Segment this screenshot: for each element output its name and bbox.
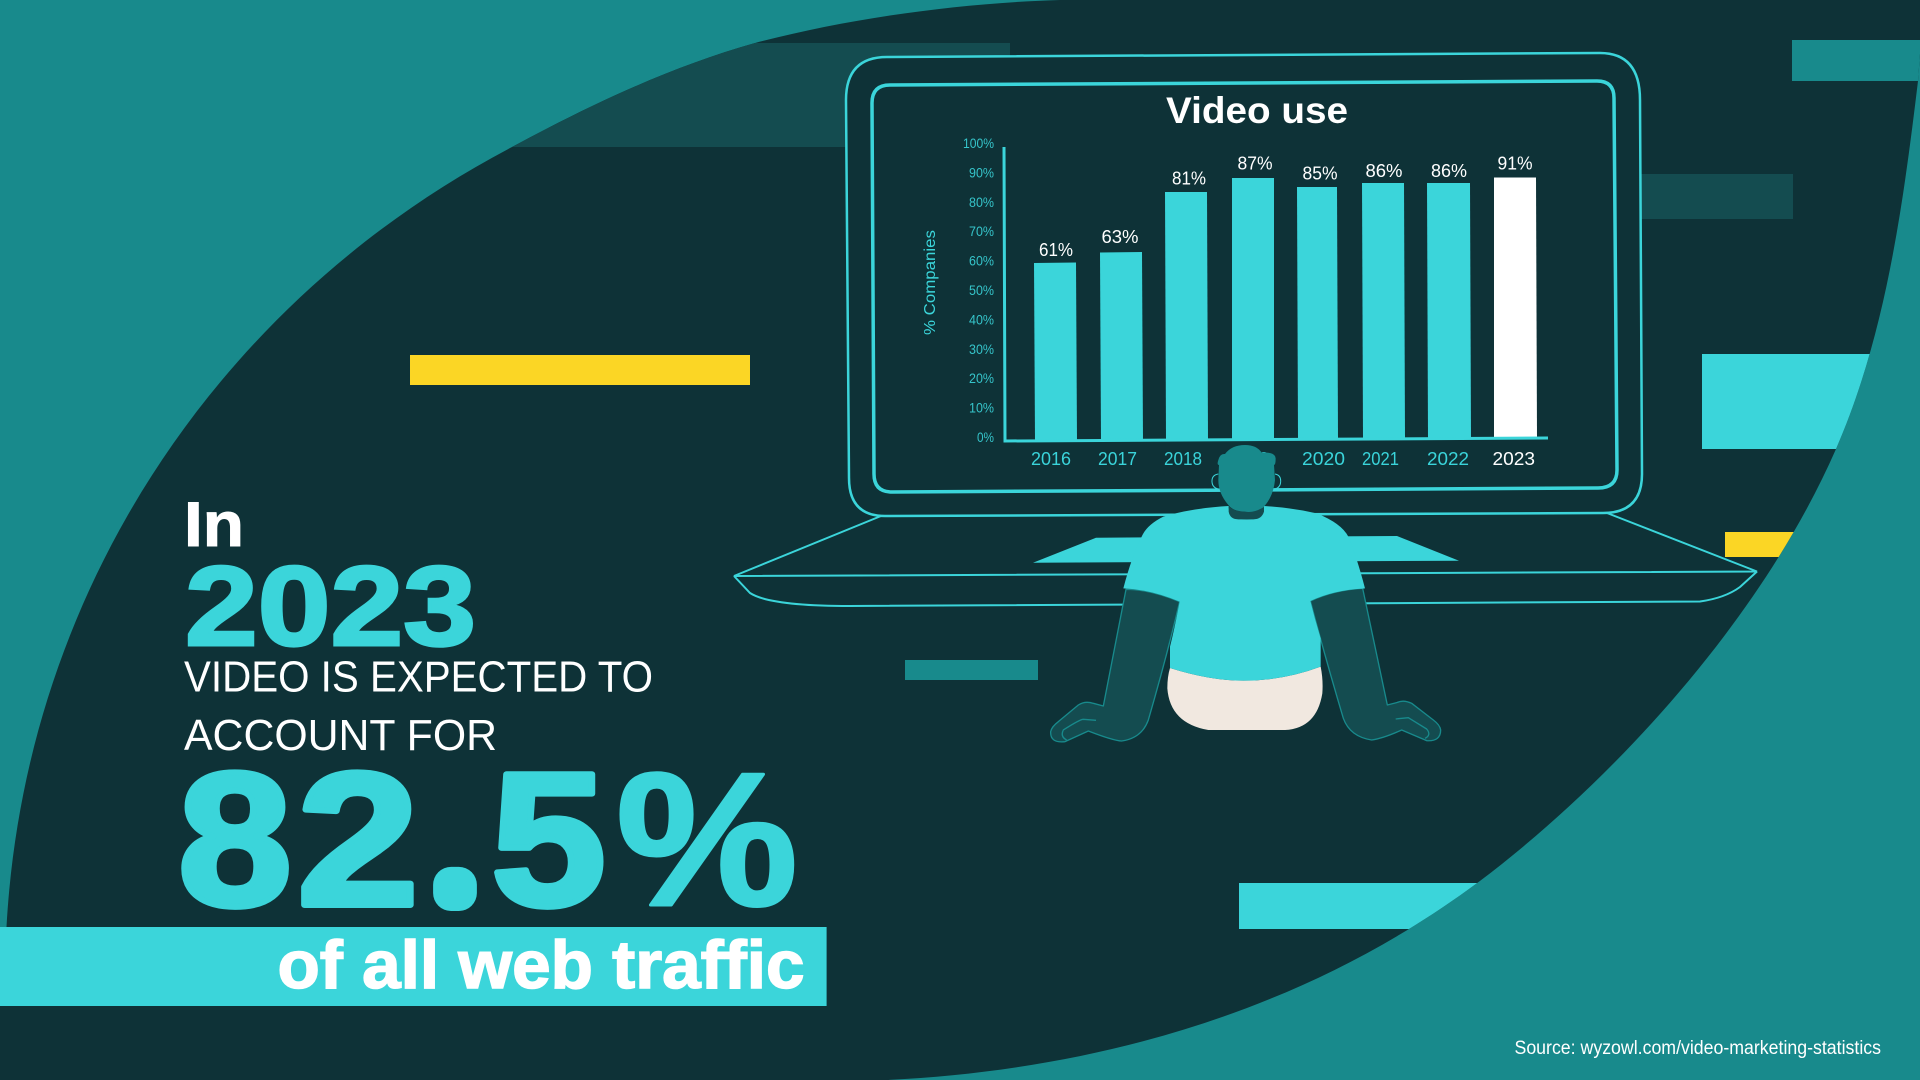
y axis labels bbox=[963, 135, 994, 445]
big number: 82.5%: 8 bbox=[178, 734, 292, 946]
bar 2023 highlighted bbox=[1494, 178, 1537, 438]
chart title: Video use bbox=[1166, 90, 1348, 131]
big number: 82.5%: . bbox=[447, 843, 463, 905]
year labels: 2019 bbox=[1229, 449, 1269, 469]
value labels: 81% bbox=[1172, 169, 1206, 189]
subheading line 1: VIDEO IS EXPECTED TO bbox=[184, 652, 653, 701]
value labels: 86% bbox=[1431, 161, 1467, 181]
banner bar bbox=[0, 927, 827, 1006]
y axis labels: 20% bbox=[969, 370, 994, 386]
big number: 82.5%: 5 bbox=[491, 734, 606, 946]
value labels: 63% bbox=[1102, 227, 1138, 247]
value labels: 85% bbox=[1302, 164, 1338, 184]
y axis labels: 40% bbox=[969, 311, 994, 327]
bar chart: video use bbox=[922, 135, 1548, 469]
person seen from behind bbox=[1051, 445, 1441, 742]
keyboard bbox=[1033, 536, 1459, 563]
shirt bbox=[1123, 506, 1365, 681]
value labels: 86% bbox=[1366, 161, 1402, 181]
y axis labels: 80% bbox=[969, 194, 994, 210]
right arm bbox=[1310, 588, 1441, 741]
head bbox=[1218, 445, 1276, 512]
left arm bbox=[1051, 589, 1180, 742]
year labels bbox=[1031, 449, 1535, 469]
heading: In: In bbox=[184, 490, 244, 560]
bars bbox=[1034, 178, 1471, 441]
y axis labels: 0% bbox=[977, 429, 994, 445]
shorts bbox=[1167, 667, 1323, 730]
big number: 82.5%: 2 bbox=[297, 734, 419, 946]
banner text: of all web traffic bbox=[278, 927, 804, 1003]
big number: 82.5%: % bbox=[616, 734, 798, 946]
value labels: 61% bbox=[1039, 240, 1073, 260]
y axis title: % Companies bbox=[922, 230, 939, 335]
axes bbox=[1004, 147, 1548, 441]
y axis labels: 30% bbox=[969, 341, 994, 357]
y axis labels: 50% bbox=[969, 282, 994, 298]
laptop screen bbox=[872, 81, 1617, 492]
subheading line 2: ACCOUNT FOR bbox=[184, 711, 497, 760]
year labels: 2020 bbox=[1302, 449, 1345, 469]
year labels: 2018 bbox=[1164, 449, 1202, 469]
y axis labels: 60% bbox=[969, 253, 994, 269]
year labels: 2022 bbox=[1427, 449, 1469, 469]
year labels: 2023 bbox=[1492, 449, 1535, 469]
laptop outer frame bbox=[846, 53, 1642, 516]
big number: 82.5% bbox=[178, 734, 798, 946]
year labels: 2017 bbox=[1098, 449, 1137, 469]
value labels: 87% bbox=[1238, 153, 1272, 173]
value labels bbox=[1039, 153, 1532, 260]
y axis labels: 90% bbox=[969, 164, 994, 180]
source: Source: wyzowl.com/video-marketing-statistics bbox=[1514, 1038, 1881, 1059]
year labels: 2021 bbox=[1362, 449, 1399, 469]
decorative rectangles bbox=[400, 40, 1920, 929]
year labels: 2016 bbox=[1031, 449, 1071, 469]
value labels: 91% bbox=[1498, 153, 1532, 173]
laptop base bbox=[734, 513, 1757, 606]
y axis labels: 100% bbox=[963, 135, 994, 151]
ears bbox=[1212, 474, 1281, 489]
neck bbox=[1229, 506, 1264, 519]
heading: 2023: 2023 bbox=[185, 543, 476, 669]
y axis labels: 10% bbox=[969, 400, 994, 416]
y axis labels: 70% bbox=[969, 223, 994, 239]
